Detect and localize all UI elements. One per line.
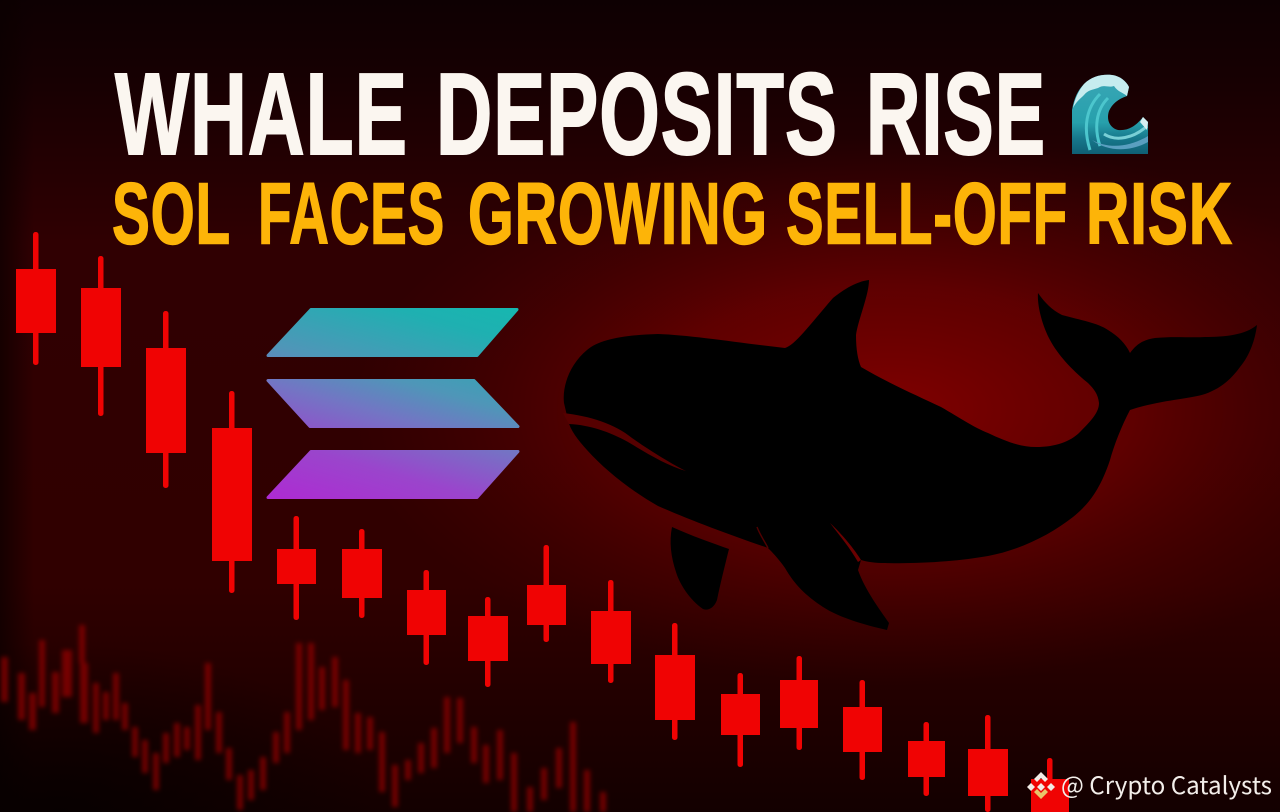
candle 7 xyxy=(407,570,446,665)
whale flipper slit xyxy=(830,523,861,562)
candle 11 xyxy=(655,623,695,740)
subtitle: SOL faces growing sell-off risk: FACES xyxy=(258,166,445,262)
subtitle: SOL faces growing sell-off risk xyxy=(112,166,1233,262)
candle 12 xyxy=(721,673,760,767)
candle 10 xyxy=(591,580,631,683)
candle 1 xyxy=(16,232,56,365)
whale small rear fin xyxy=(671,527,729,610)
title: whale deposits rise: DEPOSITS xyxy=(436,49,838,179)
whale silhouette xyxy=(563,280,1257,630)
title: whale deposits rise: WHALE xyxy=(115,49,408,179)
watermark: Crypto Catalysts: @ Crypto Catalysts xyxy=(1061,766,1272,801)
title: whale deposits rise xyxy=(115,49,1046,179)
candlestick chart: falling red candles xyxy=(16,232,1069,812)
candle 8 xyxy=(468,597,508,687)
subtitle: SOL faces growing sell-off risk: GROWING xyxy=(468,166,768,262)
faded background price chart xyxy=(1,625,606,812)
icon: wave emoji xyxy=(1072,75,1148,154)
candle 16 xyxy=(968,715,1008,812)
whale mouth slit xyxy=(563,413,686,471)
candle 2 xyxy=(81,256,121,416)
title: whale deposits rise: RISE xyxy=(866,49,1046,179)
candle 14 xyxy=(843,680,882,780)
icon: Binance diamond logo xyxy=(1027,772,1055,799)
icon: Solana logo xyxy=(268,310,518,498)
candle 4 xyxy=(212,391,252,593)
subtitle: SOL faces growing sell-off risk: SELL-OFF xyxy=(786,166,1068,262)
candle 5 xyxy=(277,516,316,620)
candle 17 xyxy=(1031,758,1069,812)
candle 6 xyxy=(342,529,382,618)
candle 15 xyxy=(908,722,945,796)
candle 3 xyxy=(146,311,186,488)
subtitle: SOL faces growing sell-off risk: SOL xyxy=(112,166,231,262)
candle 13 xyxy=(780,656,818,750)
candle 9 xyxy=(527,545,566,642)
